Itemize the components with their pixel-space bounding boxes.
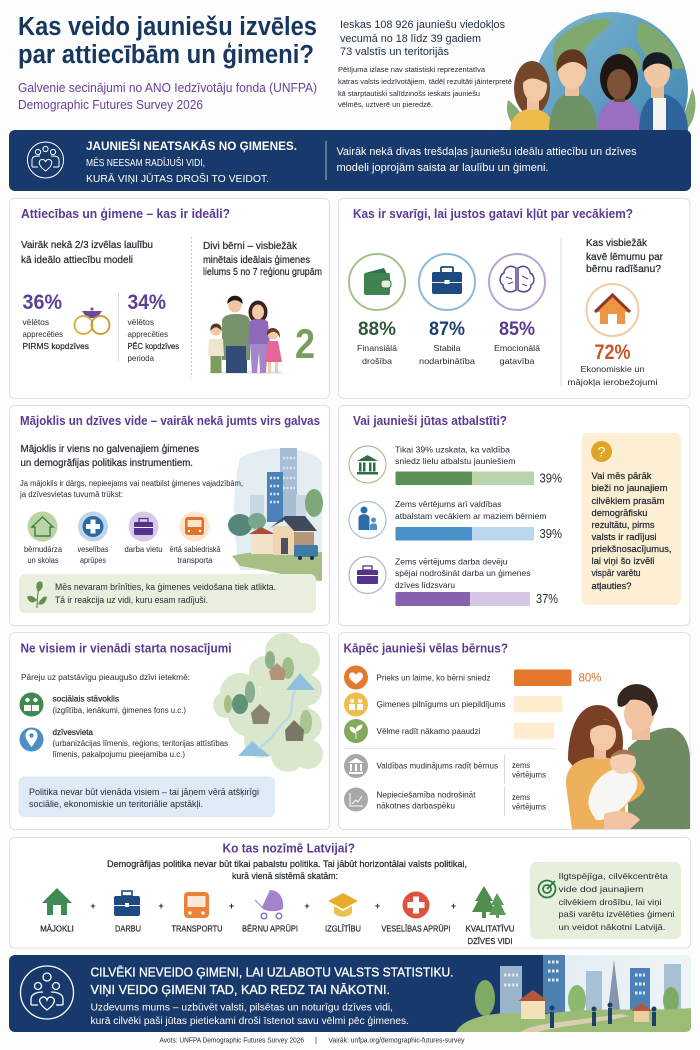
callout text: priekšnosacījumus, <box>592 544 672 554</box>
item: transport <box>172 892 223 934</box>
callout text <box>592 471 672 591</box>
stat: financial security <box>349 254 405 366</box>
callout: sustainable environment <box>530 862 681 939</box>
source footer: Vairāk: unfpa.org/demographic-futures-survey <box>328 1038 465 1044</box>
item: healthcare: VESELĪBAS APRŪPI <box>382 924 450 934</box>
closing text: kurā cilvēki paši jūtas pietiekami droši īstenot savu vēlmi pēc ģimenes. <box>90 1014 409 1027</box>
heading: Kas ir svarīgi, lai justos gatavi kļūt par vecākiem? <box>353 206 633 221</box>
marriage subheading <box>21 240 153 266</box>
factor: place of residence: dzīvesvieta <box>52 728 94 737</box>
plus: + <box>90 901 96 911</box>
reason: future workforce <box>344 787 546 816</box>
callout: policy <box>18 776 275 817</box>
heading: Attiecības un ģimene – kas ir ideāli? <box>21 206 230 221</box>
stat: economic and housing constraints <box>568 284 658 387</box>
intro text <box>107 859 467 881</box>
stat: 36%: PIRMS kopdzīves <box>22 341 89 351</box>
callout: postponing family <box>19 574 316 613</box>
support row: parents of young children: atbalstam vecākiem ar maziem bērniem <box>395 511 546 521</box>
closing text: Uzdevums mums – uzbūvēt valsti, pilsētas un noturīgu dzīves vidi, <box>90 1002 393 1014</box>
callout text: Mēs nevaram brīnīties, ka ģimenes veidošana tiek atlikta. <box>55 582 276 592</box>
methodology note: kā starptautiski salīdzinošs ieskats jauniešu <box>338 89 480 98</box>
item: childcare: BĒRNU APRŪPI <box>242 924 298 934</box>
subtitle: Demographic Futures Survey 2026 <box>18 97 203 112</box>
illustration: city park with people <box>456 955 691 1032</box>
survey scope text: vecumā no 18 līdz 39 gadiem <box>340 33 481 45</box>
banner headline: KURĀ VIŅI JŪTAS DROŠI TO VEIDOT. <box>86 172 269 185</box>
factor: place of residence: līmenis, pakalpojumu pieejamība u.c.) <box>52 750 185 759</box>
callout text: Tā ir reakcija uz vidi, kuru esam radījuši. <box>55 595 208 605</box>
factor: social status <box>20 692 186 716</box>
service: healthcare: veselības <box>78 545 108 554</box>
item: quality living environment: KVALITATĪVU <box>466 924 515 934</box>
intro text: Demogrāfijas politika nevar būt tikai pabalstu politika. Tai jābūt horizontālai valsts politikai, <box>107 859 467 869</box>
illustration: regional map <box>213 633 323 772</box>
reason: government encouragement <box>344 754 546 784</box>
banner: young people are not giving up family <box>9 130 691 191</box>
stat: 34%: PĒC kopdzīves <box>128 341 179 351</box>
barrier question: kavē lēmumu par <box>586 252 664 263</box>
panel: do young people feel supported <box>338 406 690 626</box>
reason: government encouragement: zems <box>512 761 530 770</box>
subtitle <box>18 80 317 112</box>
methodology note: vēlmēs, uztverē un pieredzē. <box>338 100 433 109</box>
stat: stable employment: 87% <box>429 319 465 340</box>
two children subheading: Divi bērni – visbiežāk <box>203 241 298 252</box>
person: woman in purple <box>597 54 641 132</box>
service: public transport: ērtā sabiedriskā <box>170 545 221 554</box>
reason: completeness <box>344 692 562 716</box>
factor: place of residence <box>20 728 228 759</box>
callout text: Vai mēs pārāk <box>592 471 652 481</box>
callout text <box>558 871 675 932</box>
reason: joy and happiness: Prieks un laime, ko bērni sniedz <box>376 672 490 682</box>
heading: Mājoklis un dzīves vide – vairāk nekā jumts virs galvas <box>20 413 320 428</box>
support row: government <box>349 444 562 486</box>
callout text: cilvēkiem prasām <box>592 496 664 506</box>
methodology note: Pētījuma izlase nav statistiski reprezentatīva <box>338 65 486 74</box>
reason: government encouragement: vērtējums <box>512 770 546 780</box>
service: kindergarten <box>24 512 63 565</box>
item: quality living environment: DZĪVES VIDI <box>468 937 512 946</box>
item: healthcare <box>382 892 450 934</box>
panel: why young people want children <box>338 632 690 830</box>
subtitle: Galvenie secinājumi no ANO Iedzīvotāju fonda (UNFPA) <box>18 80 317 95</box>
callout text: cilvēkiem drošību, lai viņi <box>558 897 662 907</box>
callout text: vispār varētu <box>592 568 640 578</box>
housing body text <box>19 479 243 499</box>
stat: financial security: Finansiālā <box>357 343 397 353</box>
panel: unequal starting conditions <box>10 632 330 830</box>
title <box>18 13 317 69</box>
service: public transport: transporta <box>178 556 213 565</box>
reason: completeness: Ģimenes pilnīgums un piepildījums <box>376 699 506 709</box>
icon: wedding rings <box>74 308 110 334</box>
plus: + <box>229 901 234 911</box>
marriage subheading: kā ideālo attiecību modeli <box>21 255 133 266</box>
stat: economic and housing constraints: 72% <box>594 341 631 364</box>
icon: family with heart <box>20 966 74 1019</box>
stat: emotional readiness: 85% <box>499 319 535 340</box>
plus: + <box>375 901 380 911</box>
heading: Vai jaunieši jūtas atbalstīti? <box>353 413 507 428</box>
reason: future workforce: zems <box>512 793 530 802</box>
illustration: city and houses <box>228 448 323 581</box>
reason: future workforce: Nepieciešamība nodrošināt <box>376 790 476 800</box>
marriage subheading: Vairāk nekā 2/3 izvēlas laulību <box>21 240 153 251</box>
reason: government encouragement: Valdības mudinājums radīt bērnus <box>376 760 498 770</box>
factor: social status: (izglītība, ienākumi, ģimenes fons u.c.) <box>52 706 186 715</box>
person: man in blue jacket <box>639 52 688 132</box>
callout text: valsts ir radījusi <box>592 532 657 542</box>
closing headline: CILVĒKI NEVEIDO ĢIMENI, LAI UZLABOTU VALSTS STATISTIKU. <box>90 964 454 980</box>
stat: 34%: perioda <box>128 353 154 363</box>
item: education: IZGLĪTĪBU <box>325 924 361 934</box>
item: work <box>114 891 141 934</box>
survey scope text: Ieskas 108 926 jauniešu viedokļos <box>340 19 505 31</box>
closing headline: VIŅI VEIDO ĢIMENI TAD, KAD REDZ TAI NĀKOTNI. <box>90 982 390 997</box>
service: public transport <box>170 512 221 565</box>
stat: emotional readiness: gatavība <box>500 356 535 366</box>
banner statement: Vairāk nekā divas trešdaļas jauniešu ideālu attiecību un dzīves <box>336 146 637 158</box>
stat: 36%: apprecēties <box>22 329 63 339</box>
support row: parents of young children <box>349 499 562 541</box>
closing text <box>90 1002 409 1027</box>
source footer: Avots: UNFPA Demographic Futures Survey 2026 <box>160 1038 304 1044</box>
stat: 34%: apprecēties <box>128 329 168 339</box>
housing lead text: un demogrāfijas politikas instrumentiem. <box>20 458 193 469</box>
housing body text: Ja mājoklis ir dārgs, nepieejams vai neatbilst ģimenes vajadzībām, <box>20 479 243 488</box>
service: jobs <box>124 512 162 554</box>
stat: 36%: vēlētos <box>22 317 49 327</box>
stat: financial security: 88% <box>358 319 396 340</box>
icon: leaves <box>27 581 47 608</box>
factor: place of residence: (urbanizācijas līmenis, reģions, teritorijas attīstības <box>52 739 228 748</box>
intro text: Pāreju uz patstāvīgu pieaugušo dzīvi ietekmē: <box>21 672 190 682</box>
panel: housing and living environment <box>10 406 330 626</box>
stat: stable employment: nodarbinātība <box>419 356 475 366</box>
housing body text: ja dzīvesvietas tuvumā trūkst: <box>19 490 123 499</box>
stat: stable employment: Stabila <box>434 343 461 353</box>
two children subheading: lielums 5 no 7 reģionu grupām <box>203 265 322 278</box>
two children subheading <box>203 241 322 278</box>
banner headline <box>86 140 297 185</box>
support row: government: Tikai 39% uzskata, ka valdība <box>395 444 510 454</box>
support row: employers: Zems vērtējums darba devēju <box>395 556 508 566</box>
reason: joy and happiness <box>344 666 602 690</box>
stat: 34%: vēlētos <box>128 317 154 327</box>
service: kindergarten: bērnudārza <box>24 545 63 554</box>
heading: Kāpēc jaunieši vēlas bērnus? <box>344 640 508 656</box>
item: transport: TRANSPORTU <box>172 924 223 934</box>
stat: 34% <box>128 291 179 363</box>
plus: + <box>158 901 164 911</box>
stat: emotional readiness: Emocionālā <box>494 343 540 353</box>
service: healthcare <box>78 512 108 565</box>
support row: employers: dzīves līdzsvaru <box>395 580 455 590</box>
stat: 34%: 34% <box>128 291 166 314</box>
item: housing: MĀJOKLI <box>40 924 74 934</box>
barrier question: bērnu radīšanu? <box>586 264 661 275</box>
banner headline: JAUNIEŠI NEATSAKĀS NO ĢIMENES. <box>86 140 297 153</box>
heading: Ko tas nozīmē Latvijai? <box>222 840 355 856</box>
reason: future workforce: vērtējums <box>512 802 546 812</box>
support row: employers <box>349 556 558 606</box>
item: housing <box>40 888 74 934</box>
stat: emotional readiness <box>489 254 545 366</box>
support row: government: 39% <box>540 472 562 486</box>
callout: policy: Politika nevar būt vienāda visiem – tai jāņem vērā atšķirīgi <box>29 787 259 797</box>
person: woman in yellow <box>510 61 554 132</box>
barrier question: Kas visbiežāk <box>586 238 648 249</box>
survey scope text: 73 valstīs un teritorijās <box>340 46 449 58</box>
source footer: | <box>315 1036 317 1044</box>
callout text: atļauties? <box>592 581 632 591</box>
service: healthcare: aprūpes <box>80 556 106 565</box>
banner headline: MĒS NEESAM RADĪJUŠI VIDI, <box>86 156 205 169</box>
callout text: un veidot nākotni Latvijā. <box>558 922 666 932</box>
panel: what it means for Latvia <box>10 838 690 948</box>
icon: family with heart <box>28 142 64 178</box>
callout text: vide dod jaunajiem <box>558 884 644 894</box>
service: jobs: darba vietu <box>124 545 162 554</box>
banner statement: modeli joprojām saista ar laulību un ģimeni. <box>336 161 548 174</box>
barrier question <box>586 238 664 275</box>
callout text: lai viņi šo izvēli <box>592 556 654 566</box>
closing headline <box>90 964 454 997</box>
stat: economic and housing constraints: mājokļa ierobežojumi <box>568 377 658 387</box>
icon: question mark: ? <box>598 444 606 460</box>
stat: 36%: 36% <box>22 291 62 314</box>
big number 2: 2 <box>295 320 315 367</box>
stat: stable employment <box>419 254 475 366</box>
closing banner <box>9 955 691 1032</box>
plus: + <box>451 901 456 911</box>
housing lead text: Mājoklis ir viens no galvenajiem ģimenes <box>20 442 199 455</box>
support row: parents of young children: Zems vērtējums arī valdības <box>395 499 502 509</box>
reason: next generation <box>344 719 554 743</box>
callout text: rezultātu, pirms <box>592 520 655 530</box>
plus: + <box>304 901 310 911</box>
item: quality living environment <box>466 886 515 946</box>
reason: joy and happiness: 80% <box>578 670 602 684</box>
title: par attiecībām un ģimeni? <box>18 41 314 69</box>
methodology note: katras valsts iedzīvotājiem, tādēļ rezultāti jāinterpretē <box>338 77 512 86</box>
reason: next generation: Vēlme radīt nākamo paaudzi <box>376 726 481 736</box>
callout text <box>55 582 276 605</box>
panel: what matters to feel ready for parenthood <box>338 198 690 398</box>
callout text: paši varētu izvēlēties ģimeni <box>558 909 675 919</box>
illustration: family of four <box>208 296 282 374</box>
service: kindergarten: un skolas <box>28 556 58 565</box>
stat: financial security: drošība <box>362 356 392 366</box>
item: work: DARBU <box>115 924 141 934</box>
housing lead text <box>20 442 199 469</box>
stat: economic and housing constraints: Ekonomiskie un <box>580 364 645 374</box>
methodology note <box>338 65 512 109</box>
illustration: parents with baby <box>566 684 690 829</box>
illustration: globe and four young people <box>507 12 695 166</box>
callout: question <box>582 433 681 605</box>
support row: employers: 37% <box>536 592 558 606</box>
two children subheading: minētais ideālais ģimenes <box>203 253 310 266</box>
source footer <box>160 1036 465 1044</box>
heading: Ne visiem ir vienādi starta nosacījumi <box>20 640 232 656</box>
title: Kas veido jauniešu izvēles <box>18 13 317 41</box>
stat: 36% <box>22 291 89 351</box>
panel: relationships and family <box>10 198 330 398</box>
icon: question mark <box>591 441 612 462</box>
callout text: Ilgtspējīga, cilvēkcentrēta <box>558 871 668 881</box>
person: man in green hoodie <box>549 49 597 132</box>
survey scope text <box>340 19 505 58</box>
banner statement <box>336 146 637 174</box>
callout: policy: sociālie, ekonomiskie un teritoriālie apstākļi. <box>29 799 203 809</box>
icon: target <box>538 880 556 898</box>
support row: employers: spējai nodrošināt darba un ģimenes <box>395 568 530 578</box>
item: childcare <box>242 890 298 934</box>
item: education <box>325 893 361 934</box>
reason: future workforce: nākotnes darbaspēku <box>376 800 455 810</box>
callout text: bieži no jaunajiem <box>592 483 668 493</box>
callout text: demogrāfisku <box>592 508 648 518</box>
factor: social status: sociālais stāvoklis <box>52 694 119 704</box>
support row: government: sniedz lielu atbalstu jauniešiem <box>395 456 516 466</box>
support row: parents of young children: 39% <box>540 527 562 541</box>
intro text: kurā vienā sistēmā skatām: <box>232 871 338 881</box>
